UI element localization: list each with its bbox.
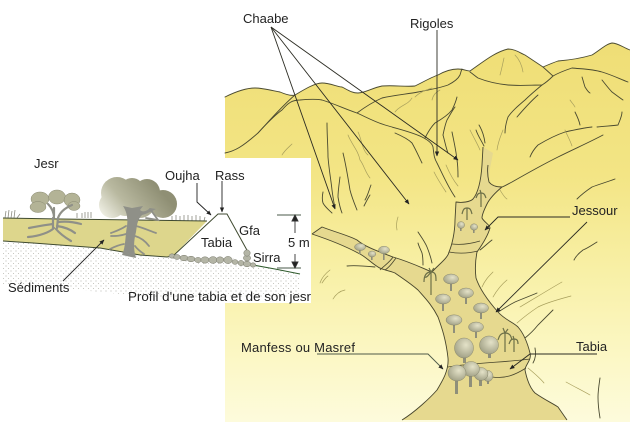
grass [5,210,205,221]
main tabia bank [448,359,530,378]
panel: mountain landscape [225,43,630,422]
large tree [99,177,177,258]
sediment fill [3,218,207,257]
large tree trunk [122,206,156,258]
tree crowns [354,222,498,382]
5 m dimension marker [277,215,301,268]
ridge lines [225,43,630,418]
inset labels: Sirra [253,250,281,265]
inset labels: Sédiments [8,280,70,295]
inset labels: 5 m [288,235,310,250]
inset background [0,158,311,303]
callouts on landscape: Jessour [572,203,618,218]
palm trees [424,190,518,352]
valley trees [354,190,518,394]
mountain mass [225,43,630,422]
inset labels: Tabia [201,235,233,250]
leader lines [271,27,597,369]
callouts on landscape: Manfess ou Masref [241,340,355,355]
sirra stones [169,250,256,267]
small tree trunk and roots [28,204,81,241]
large tree crown [99,177,177,218]
tree trunks [359,226,491,394]
inset labels: Profil d'une tabia et de son jesr [128,289,312,304]
large tree roots [110,209,158,254]
faint hill strokes [282,55,590,395]
callouts on landscape [241,11,618,369]
left branch tabia bank [380,257,396,270]
tabia outline and ground lines [3,214,300,274]
inset labels: Jesr [34,156,59,171]
upper tabia bank [449,241,480,253]
inset labels: Oujha [165,168,200,183]
inset labels [8,156,312,304]
valley shape [312,147,567,420]
callouts on landscape: Rigoles [410,16,454,31]
panel: valley floor with jessour [312,147,567,420]
panel: tabia cross-section inset [0,156,312,304]
label arrows [63,181,222,281]
small tree [28,190,81,241]
inset labels: Rass [215,168,245,183]
valley outline [312,147,567,420]
landscape labels: Chaabe [243,11,289,26]
callouts on landscape: Tabia [576,339,608,354]
inset labels: Gfa [239,223,261,238]
small tree crown [30,190,80,212]
stippled ground [3,241,300,298]
